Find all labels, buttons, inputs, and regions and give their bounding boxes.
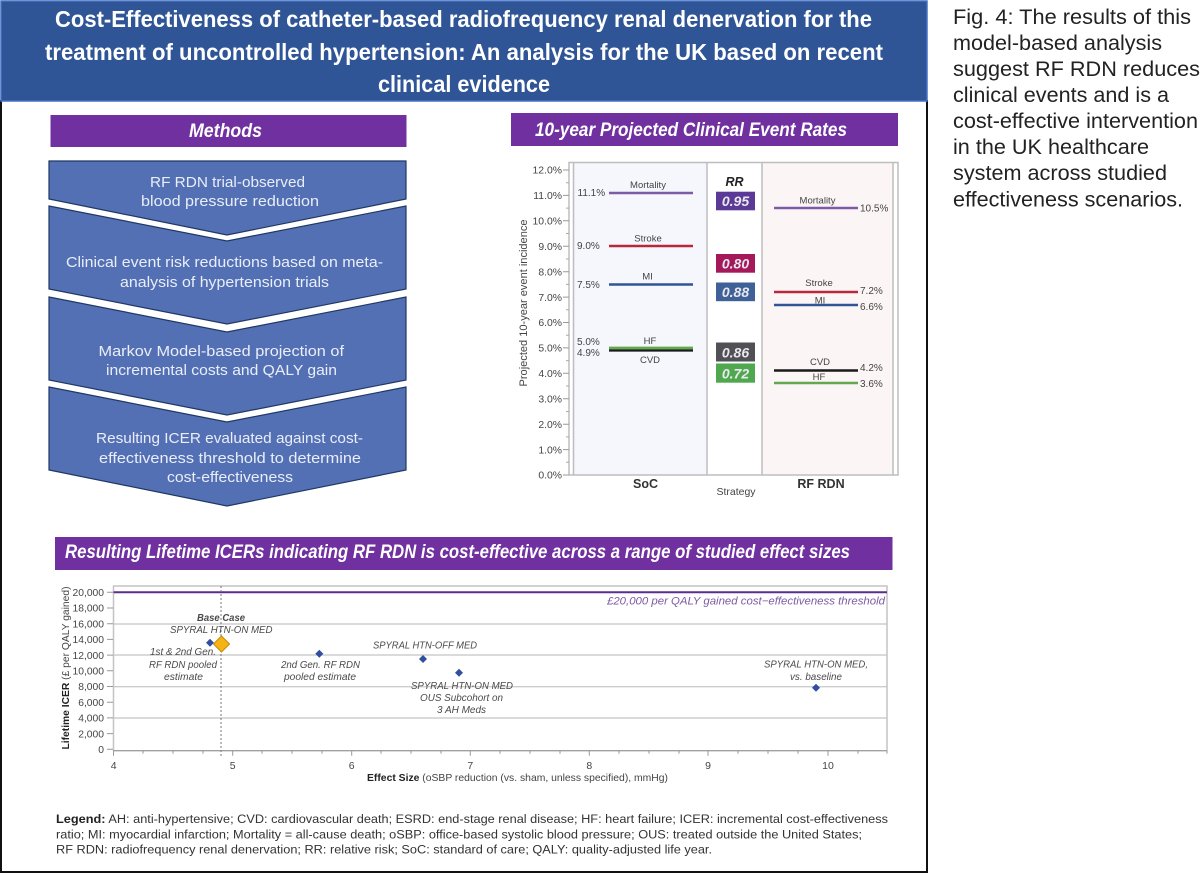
step 3: Markov model projection: Markov Model-based projection of bbox=[98, 344, 345, 360]
y-axis tick labels: 7.0% bbox=[538, 293, 562, 304]
y-axis tick labels: 10,000 bbox=[72, 666, 104, 678]
y-axis tick labels: 9.0% bbox=[538, 242, 562, 253]
relative risk badges: 0.72 bbox=[722, 366, 749, 382]
y-axis tick labels: 1.0% bbox=[538, 445, 562, 456]
y-axis tick labels: 8,000 bbox=[78, 682, 104, 693]
legend: RF RDN: radiofrequency renal denervation; RR: relative risk; SoC: standard of care; QALY: quality-adjusted life year. bbox=[56, 842, 712, 856]
x-axis labels bbox=[633, 477, 845, 498]
figure caption bbox=[953, 5, 1200, 212]
step 2: clinical event risk reductions: Clinical event risk reductions based on meta- bbox=[66, 255, 383, 271]
panel: lifetime ICERs bbox=[55, 537, 892, 784]
y-axis tick labels: 18,000 bbox=[72, 604, 104, 615]
relative risk badges: 0.95 bbox=[722, 193, 749, 209]
legend: Legend: AH: anti-hypertensive; CVD: cardiovascular death; ESRD: end-stage renal disease; HF: heart failure; ICER: incremental cost-effectiveness bbox=[56, 812, 888, 826]
series: SoC: 7.5% bbox=[577, 280, 600, 291]
y-axis tick labels: 16,000 bbox=[72, 619, 104, 630]
series: SoC: 5.0% bbox=[577, 337, 600, 348]
x-axis tick labels: 6 bbox=[349, 760, 355, 772]
y-axis tick labels: 14,000 bbox=[72, 635, 104, 646]
point annotations: estimate bbox=[164, 671, 203, 683]
step 2: clinical event risk reductions: analysis of hypertension trials bbox=[120, 275, 329, 291]
y-axis tick labels: 0.0% bbox=[538, 471, 562, 482]
series: RF RDN: Mortality bbox=[800, 196, 836, 206]
relative risk badges: 0.80 bbox=[722, 256, 749, 272]
x-axis tick labels: 4 bbox=[111, 760, 117, 772]
x-axis title: Effect Size (oSBP reduction (vs. sham, unless specified), mmHg) bbox=[367, 772, 668, 784]
step 4: ICER evaluation: Resulting ICER evaluated against cost- bbox=[96, 431, 363, 447]
poster frame bbox=[1, 100, 927, 872]
point annotations: pooled estimate bbox=[283, 671, 356, 683]
point annotations: SPYRAL HTN-ON MED, bbox=[764, 659, 868, 671]
y-axis tick labels: 4,000 bbox=[78, 714, 104, 725]
y-axis tick labels bbox=[533, 166, 562, 482]
heading: methods bbox=[50, 115, 406, 147]
point annotations: Base Case bbox=[197, 612, 245, 624]
figure caption: in the UK healthcare bbox=[953, 135, 1149, 159]
title banner bbox=[1, 1, 927, 101]
figure caption: model-based analysis bbox=[953, 31, 1162, 55]
heading: lifetime ICERs: Resulting Lifetime ICERs indicating RF RDN is cost-effective across a range of studied effect sizes bbox=[65, 542, 850, 563]
step 4: ICER evaluation: effectiveness threshold to determine bbox=[99, 451, 361, 467]
relative risk badges: 0.88 bbox=[722, 284, 749, 300]
series: RF RDN: 3.6% bbox=[860, 379, 883, 390]
point annotations: SPYRAL HTN-ON MED bbox=[170, 624, 273, 636]
relative risk badges: RR bbox=[725, 175, 744, 189]
x-axis tick labels: 10 bbox=[822, 760, 834, 772]
panel: methods bbox=[49, 115, 406, 506]
series: SoC: 4.9% bbox=[577, 348, 600, 359]
series: RF RDN: Stroke bbox=[805, 278, 833, 289]
step 1: blood pressure reduction: RF RDN trial-observed bbox=[150, 175, 305, 191]
series: SoC: Mortality bbox=[630, 180, 666, 191]
figure caption: Fig. 4: The results of this bbox=[953, 5, 1191, 29]
x-axis tick labels bbox=[111, 760, 834, 772]
y-axis tick labels: 3.0% bbox=[538, 394, 562, 406]
figure caption: suggest RF RDN reduces bbox=[953, 57, 1200, 81]
y-axis tick labels: 4.0% bbox=[538, 369, 562, 380]
step 3: Markov model projection: incremental costs and QALY gain bbox=[106, 363, 337, 379]
x-axis tick labels: 9 bbox=[705, 760, 711, 772]
title banner: treatment of uncontrolled hypertension: An analysis for the UK based on recent bbox=[45, 39, 883, 65]
series: RF RDN: HF bbox=[813, 372, 826, 383]
point annotations: 2nd Gen. RF RDN bbox=[280, 659, 360, 671]
point annotations bbox=[149, 612, 868, 716]
point annotations: 3 AH Meds bbox=[437, 704, 487, 716]
data points bbox=[206, 636, 820, 692]
series: RF RDN: MI bbox=[815, 296, 825, 306]
figure caption: clinical events and is a bbox=[953, 83, 1169, 107]
series: SoC: MI bbox=[642, 272, 653, 282]
y-axis tick labels: 6.0% bbox=[538, 318, 562, 329]
y-axis tick labels: 2,000 bbox=[78, 729, 104, 740]
step 4: ICER evaluation bbox=[49, 387, 406, 506]
step 1: blood pressure reduction bbox=[49, 161, 406, 235]
x-axis tick labels: 7 bbox=[467, 760, 473, 772]
chart: event rates by strategy bbox=[518, 162, 898, 498]
heading: lifetime ICERs bbox=[55, 537, 892, 570]
series: RF RDN: CVD bbox=[810, 357, 830, 368]
heading: methods: Methods bbox=[189, 121, 262, 142]
y-axis tick labels: 8.0% bbox=[538, 267, 562, 278]
series: SoC: 11.1% bbox=[578, 188, 605, 199]
step 4: ICER evaluation: cost-effectiveness bbox=[167, 470, 293, 486]
heading: event rates: 10-year Projected Clinical Event Rates bbox=[535, 120, 847, 141]
base case reference line bbox=[220, 586, 222, 757]
point annotations: RF RDN pooled bbox=[149, 659, 218, 671]
series: RF RDN bbox=[774, 196, 888, 390]
point annotations: vs. baseline bbox=[790, 671, 842, 683]
series: RF RDN: 7.2% bbox=[860, 286, 883, 297]
series: SoC: Stroke bbox=[634, 234, 662, 244]
series: SoC bbox=[577, 180, 693, 366]
x-axis tick labels: 5 bbox=[230, 760, 236, 772]
series: RF RDN: 6.6% bbox=[860, 302, 883, 313]
series: SoC: 9.0% bbox=[577, 241, 600, 252]
y-axis title: Projected 10-year event incidence bbox=[518, 220, 530, 386]
y-axis tick labels: 12.0% bbox=[533, 166, 562, 176]
point annotations: SPYRAL HTN-ON MED bbox=[411, 680, 513, 692]
figure caption: system across studied bbox=[953, 161, 1167, 185]
title banner: clinical evidence bbox=[378, 71, 550, 97]
title banner: Cost-Effectiveness of catheter-based radiofrequency renal denervation for the bbox=[55, 6, 872, 32]
legend bbox=[56, 812, 888, 856]
series: SoC: HF bbox=[644, 336, 657, 347]
point annotations: OUS Subcohort on bbox=[420, 692, 503, 704]
step 3: Markov model projection bbox=[49, 297, 406, 415]
step 2: clinical event risk reductions bbox=[49, 206, 406, 324]
y-axis tick labels bbox=[72, 588, 104, 756]
series: RF RDN: 4.2% bbox=[860, 363, 883, 374]
relative risk badges bbox=[716, 175, 755, 383]
step 1: blood pressure reduction: blood pressure reduction bbox=[141, 194, 319, 210]
series: SoC: CVD bbox=[640, 355, 660, 366]
chart: ICER versus effect size bbox=[60, 586, 887, 784]
y-axis tick labels: 2.0% bbox=[538, 420, 562, 431]
series: RF RDN: 10.5% bbox=[860, 204, 888, 214]
heading: event rates bbox=[511, 113, 898, 146]
y-axis tick labels: 20,000 bbox=[72, 588, 104, 599]
legend: ratio; MI: myocardial infarction; Mortality = all-cause death; oSBP: office-based systolic blood pressure; OUS: treated outside the United States; bbox=[56, 828, 862, 842]
y-axis tick labels: 6,000 bbox=[78, 698, 104, 709]
y-axis tick labels: 12,000 bbox=[72, 651, 104, 662]
x-axis labels: Strategy bbox=[716, 486, 756, 498]
panel: 10-year projected clinical event rates bbox=[511, 113, 898, 498]
point annotations: 1st & 2nd Gen. bbox=[150, 646, 216, 658]
y-axis tick labels: 0 bbox=[98, 745, 104, 756]
y-axis tick labels: 10.0% bbox=[533, 216, 562, 228]
figure caption: cost-effective intervention bbox=[953, 109, 1198, 133]
y-axis tick labels: 5.0% bbox=[538, 344, 562, 355]
y-axis title: Lifetime ICER (£ per QALY gained) bbox=[60, 586, 72, 750]
x-axis labels: SoC bbox=[633, 477, 658, 491]
relative risk badges: 0.86 bbox=[722, 344, 749, 360]
y-axis tick labels: 11.0% bbox=[533, 191, 562, 202]
figure caption: effectiveness scenarios. bbox=[953, 188, 1183, 212]
threshold line: £20,000 per QALY gained cost−effectiveness threshold bbox=[606, 596, 886, 608]
x-axis tick labels: 8 bbox=[586, 760, 592, 772]
x-axis labels: RF RDN bbox=[797, 477, 845, 491]
point annotations: SPYRAL HTN-OFF MED bbox=[373, 640, 477, 652]
